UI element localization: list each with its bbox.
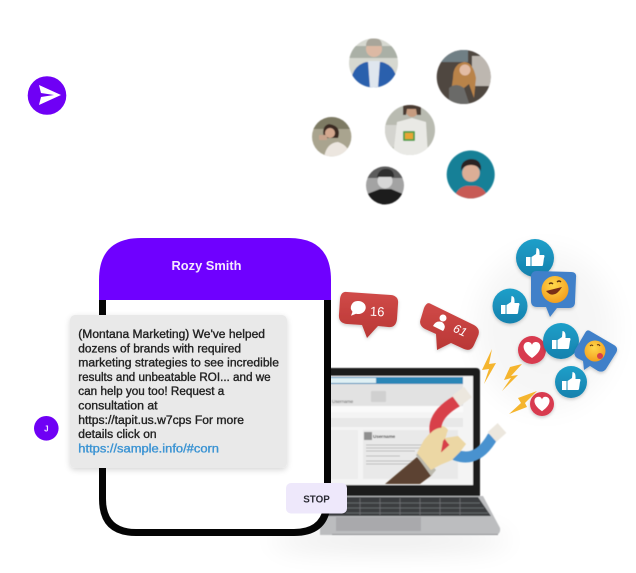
icon: thumbs up middle: [543, 323, 579, 359]
avatar: woman with long hair: [436, 50, 492, 106]
notification: 16 comments: [339, 292, 398, 338]
message text: details click on: [78, 429, 157, 441]
icon: lightning bolt one: [482, 349, 496, 384]
notification: 61 followers: 61: [451, 321, 469, 340]
icon: thumbs up top: [516, 239, 554, 277]
message bubble: [70, 315, 287, 468]
fingers over magnet: [419, 428, 449, 469]
icon: lightning bolt three: [509, 391, 537, 414]
post author: Username: [373, 434, 396, 439]
message text: (Montana Marketing) We've helped: [78, 329, 265, 341]
icon: thumbs up lower: [555, 366, 587, 398]
magnet in hand: [385, 392, 502, 484]
message text: [78, 329, 279, 455]
icon: thumbs up left: [492, 288, 528, 324]
notification: 61 followers: [420, 303, 479, 350]
phone: [99, 238, 331, 536]
icon: kissing emoji bubble: [574, 330, 617, 372]
sender avatar J: J: [44, 424, 49, 434]
magnet blue arm: [445, 436, 493, 457]
profile name: Username: [332, 399, 354, 404]
keyboard: [325, 497, 491, 516]
laptop screen: [320, 376, 473, 485]
magnet blue tip: [492, 428, 502, 437]
icon: small heart: [530, 392, 554, 416]
stop button: [286, 483, 347, 514]
avatar: person in printed shirt: [385, 105, 435, 156]
icon: laughing emoji bubble: [531, 271, 576, 317]
message text: dozens of brands with required: [78, 343, 241, 355]
avatar: man in blue suit: [349, 38, 399, 90]
message text: https://sample.info/#corn: [78, 443, 219, 455]
soft background glow: [270, 250, 615, 546]
laptop base: [320, 496, 500, 535]
stop button: STOP: [303, 493, 330, 505]
icon: lightning bolt two: [502, 364, 522, 391]
magnet red tip: [456, 392, 468, 401]
sender avatar J: [34, 416, 59, 441]
message text: can help you too! Request a: [78, 386, 225, 398]
message text: consultation at: [78, 400, 158, 412]
icon: send button: [28, 76, 66, 115]
hand: [417, 426, 466, 470]
contact name: Rozy Smith: [172, 259, 242, 273]
sleeve: [385, 457, 432, 484]
phone header: [99, 238, 331, 300]
avatar: man in monochrome: [365, 166, 405, 206]
message text: marketing strategies to see incredible: [78, 358, 279, 370]
avatar: man on teal background: [446, 150, 496, 200]
laptop lid: [320, 368, 480, 497]
avatar: woman drinking: [312, 117, 352, 158]
message text: results and unbeatable ROI... and we: [78, 372, 271, 384]
notification: 16 comments: 16: [370, 304, 385, 319]
icon: heart: [518, 336, 546, 364]
magnet red arm: [435, 401, 457, 449]
laptop: [320, 368, 500, 535]
message text: https://tapit.us.w7cps For more: [78, 415, 244, 427]
avatars group: [312, 38, 496, 206]
phone frame: [99, 290, 331, 536]
